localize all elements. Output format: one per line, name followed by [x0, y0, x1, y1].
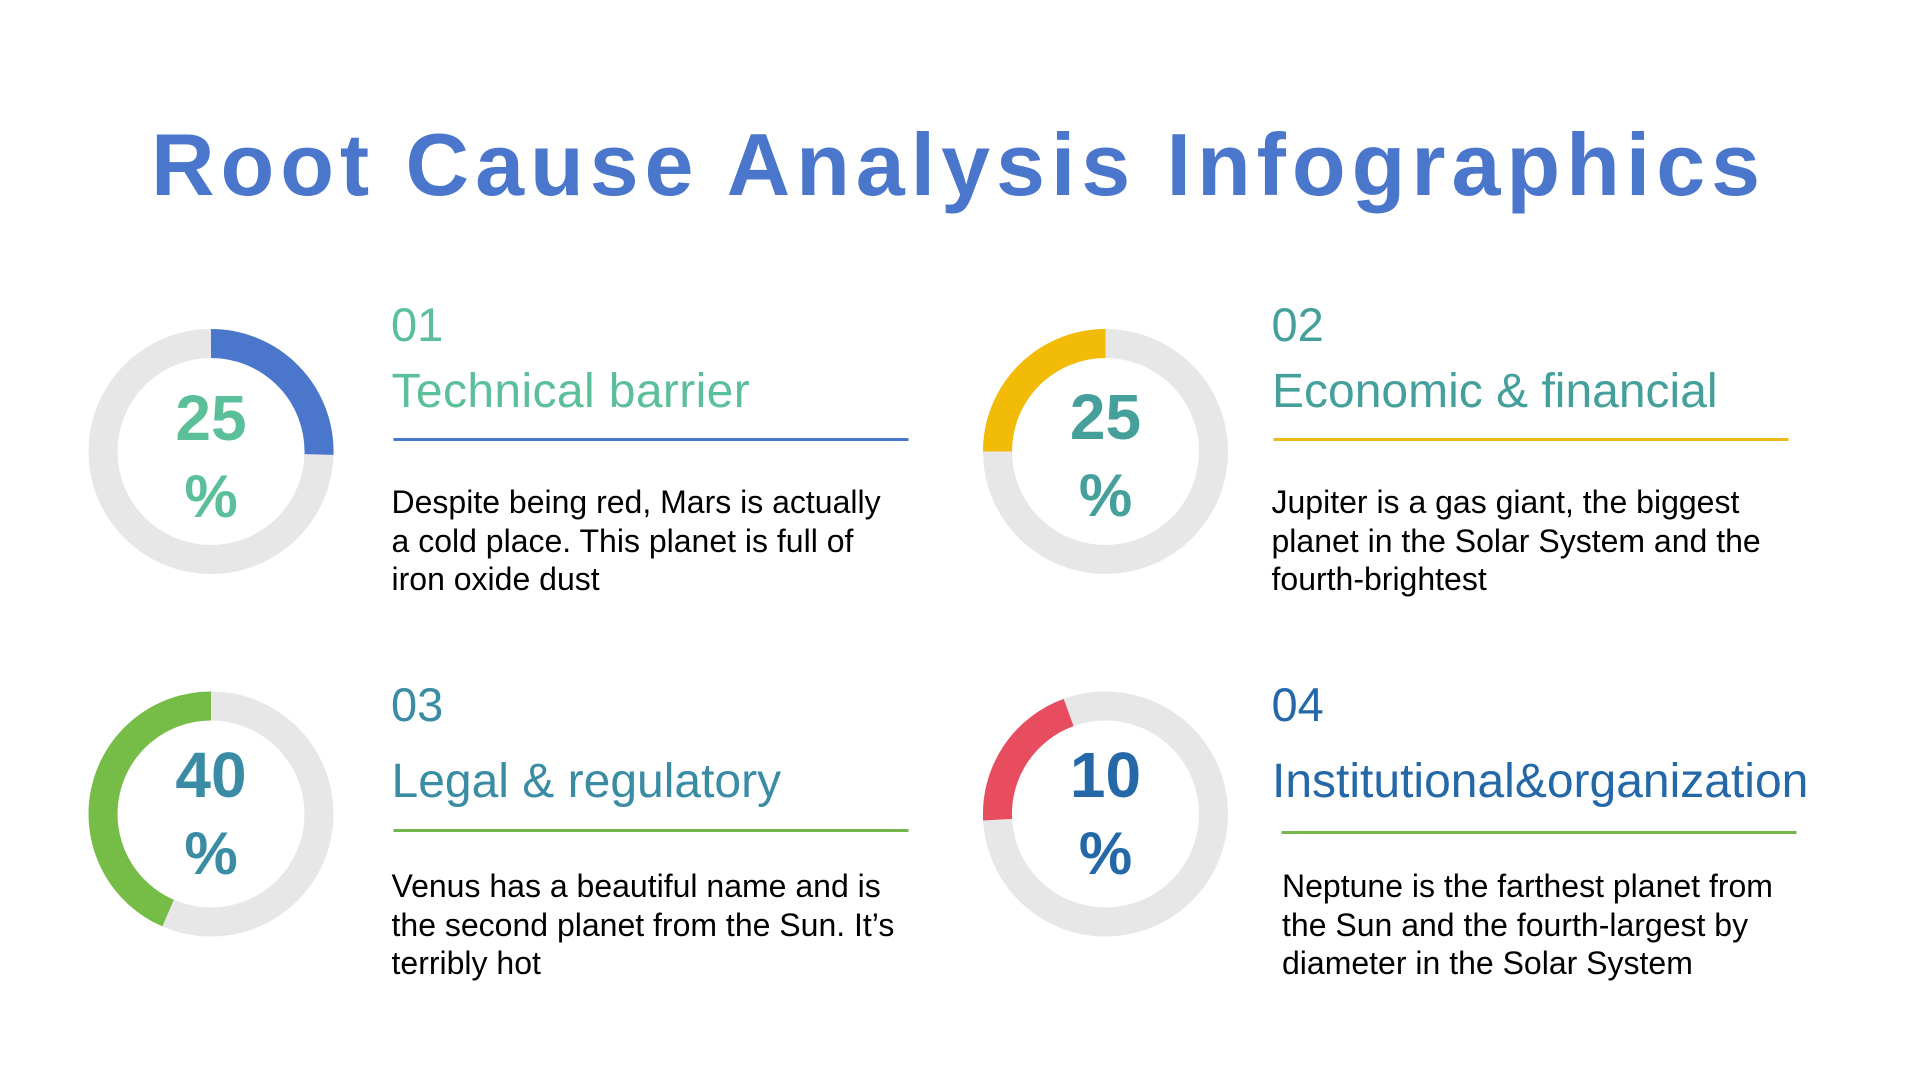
body text: Venus has a beautiful name and is	[392, 868, 881, 904]
divider line	[394, 829, 908, 832]
number 02: 02	[1272, 298, 1324, 351]
heading: legal and regulatory: Legal & regulatory	[392, 755, 781, 808]
panel: 02 economic and financial	[998, 298, 1788, 597]
panel: 03 legal and regulatory	[103, 678, 908, 981]
body text: the Sun and the fourth-largest by	[1282, 907, 1748, 943]
heading: technical barrier: Technical barrier	[392, 365, 750, 418]
body text: the second planet from the Sun. It’s	[392, 907, 894, 943]
body text: Neptune is the farthest planet from	[1282, 868, 1773, 904]
body text	[392, 484, 881, 597]
body text: iron oxide dust	[392, 561, 600, 597]
number 03: 03	[391, 678, 443, 731]
donut chart: 25 percent yellow: %	[1079, 462, 1132, 529]
body text: fourth-brightest	[1272, 561, 1487, 597]
donut chart: 25 percent blue: %	[184, 463, 238, 530]
heading: economic and financial: Economic & financial	[1272, 365, 1718, 418]
donut chart: 40 percent green: %	[184, 820, 238, 887]
donut chart: 10 percent red	[997, 706, 1214, 922]
donut chart: 40 percent green	[103, 706, 319, 922]
number 01: 01	[391, 298, 443, 351]
donut chart: 40 percent green: 40	[175, 739, 247, 811]
panel: 04 institutional and organization	[997, 678, 1808, 981]
body text: terribly hot	[392, 945, 541, 981]
title: Root Cause Analysis Infographics	[151, 115, 1766, 214]
number 04: 04	[1272, 678, 1324, 731]
divider line	[1274, 438, 1788, 441]
body text: a cold place. This planet is full of	[392, 523, 854, 559]
donut chart: 25 percent yellow	[998, 344, 1214, 560]
donut chart: 10 percent red: 10	[1070, 739, 1141, 811]
panel: 01 technical barrier	[103, 298, 908, 597]
body text	[1282, 868, 1773, 981]
body text: diameter in the Solar System	[1282, 945, 1693, 981]
donut chart: 25 percent blue	[103, 344, 319, 560]
divider line	[1282, 831, 1796, 834]
divider line	[394, 438, 908, 441]
donut chart: 10 percent red: %	[1079, 820, 1132, 887]
body text: planet in the Solar System and the	[1272, 523, 1761, 559]
body text	[392, 868, 894, 981]
donut chart: 25 percent blue: 25	[175, 382, 247, 454]
body text: Despite being red, Mars is actually	[392, 484, 881, 520]
heading: institutional and organization: Institutional&organization	[1272, 755, 1808, 808]
body text: Jupiter is a gas giant, the biggest	[1272, 484, 1739, 520]
body text	[1272, 484, 1761, 597]
donut chart: 25 percent yellow: 25	[1070, 381, 1141, 453]
